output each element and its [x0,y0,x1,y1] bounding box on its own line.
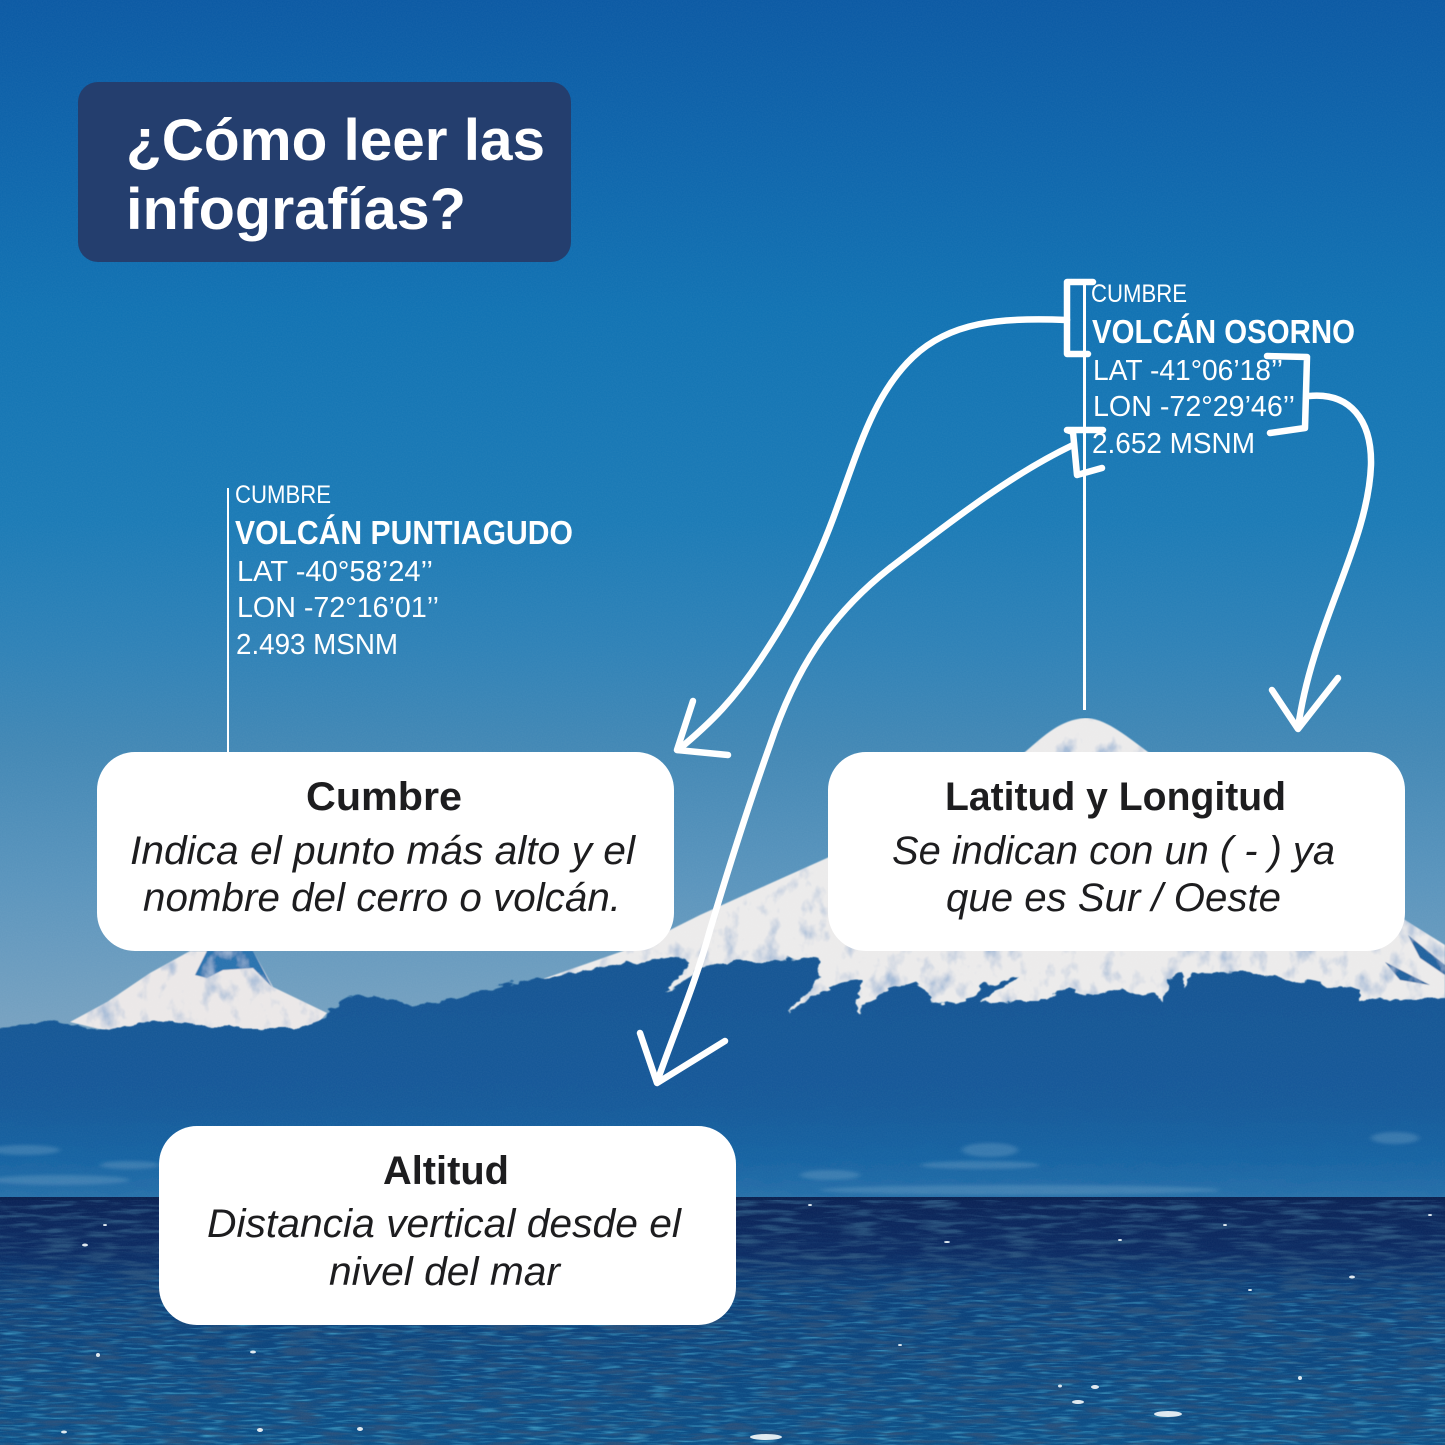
data label: Volcán Osorno: VOLCÁN OSORNO [1092,313,1355,350]
leader line: Puntiagudo [227,488,229,753]
mountain: Volcán Puntiagudo [70,951,327,1032]
background: sea [0,1197,1445,1445]
title panel [78,82,571,262]
card: Latitud y Longitud [828,752,1405,951]
title: ¿Cómo leer las [126,108,545,173]
mountain: Volcán Osorno snow [540,718,1445,1025]
card: Altitud: Altitud [383,1149,509,1193]
data label: Volcán Osorno: LAT -41°06’18’’ [1093,355,1283,387]
data label: Volcán Puntiagudo: LON -72°16’01’’ [237,592,439,624]
arrow: cumbre bracket to Cumbre card [677,282,1093,755]
card: Latitud y Longitud: Latitud y Longitud [945,775,1286,819]
card: Latitud y Longitud: que es Sur / Oeste [946,876,1281,920]
leader line: Osorno [1083,282,1086,710]
card: Cumbre: Indica el punto más alto y el [130,829,636,873]
card: Altitud: Distancia vertical desde el [207,1202,682,1246]
arrow: coordinates bracket to Latitud y Longitud card [1267,356,1371,729]
data label: Volcán Osorno [1091,280,1355,460]
data label: Volcán Puntiagudo: 2.493 MSNM [236,629,398,661]
land: dark ridge in front of the volcanoes [0,958,1445,1205]
data label: Volcán Osorno: LON -72°29’46’’ [1093,391,1295,423]
background: sky [0,0,1445,1040]
data label: Volcán Osorno: CUMBRE [1091,280,1187,308]
card: Altitud [159,1126,736,1325]
data label: Volcán Puntiagudo: LAT -40°58’24’’ [237,556,433,588]
arrow: altitude bracket to Altitud card [640,430,1103,1083]
data label: Volcán Puntiagudo: VOLCÁN PUNTIAGUDO [235,514,573,551]
data label: Volcán Osorno: 2.652 MSNM [1092,428,1255,460]
data label: Volcán Puntiagudo [235,481,573,661]
card: Altitud: nivel del mar [329,1250,562,1294]
card: Cumbre: Cumbre [306,775,462,819]
data label: Volcán Puntiagudo: CUMBRE [235,481,331,509]
water glints [61,1204,1432,1440]
card: Cumbre: nombre del cerro o volcán. [143,876,621,920]
land: distant haze above the water [0,1132,1419,1195]
card: Cumbre [97,752,674,951]
title: infografías? [126,177,466,242]
card: Latitud y Longitud: Se indican con un ( - ) ya [892,829,1335,873]
